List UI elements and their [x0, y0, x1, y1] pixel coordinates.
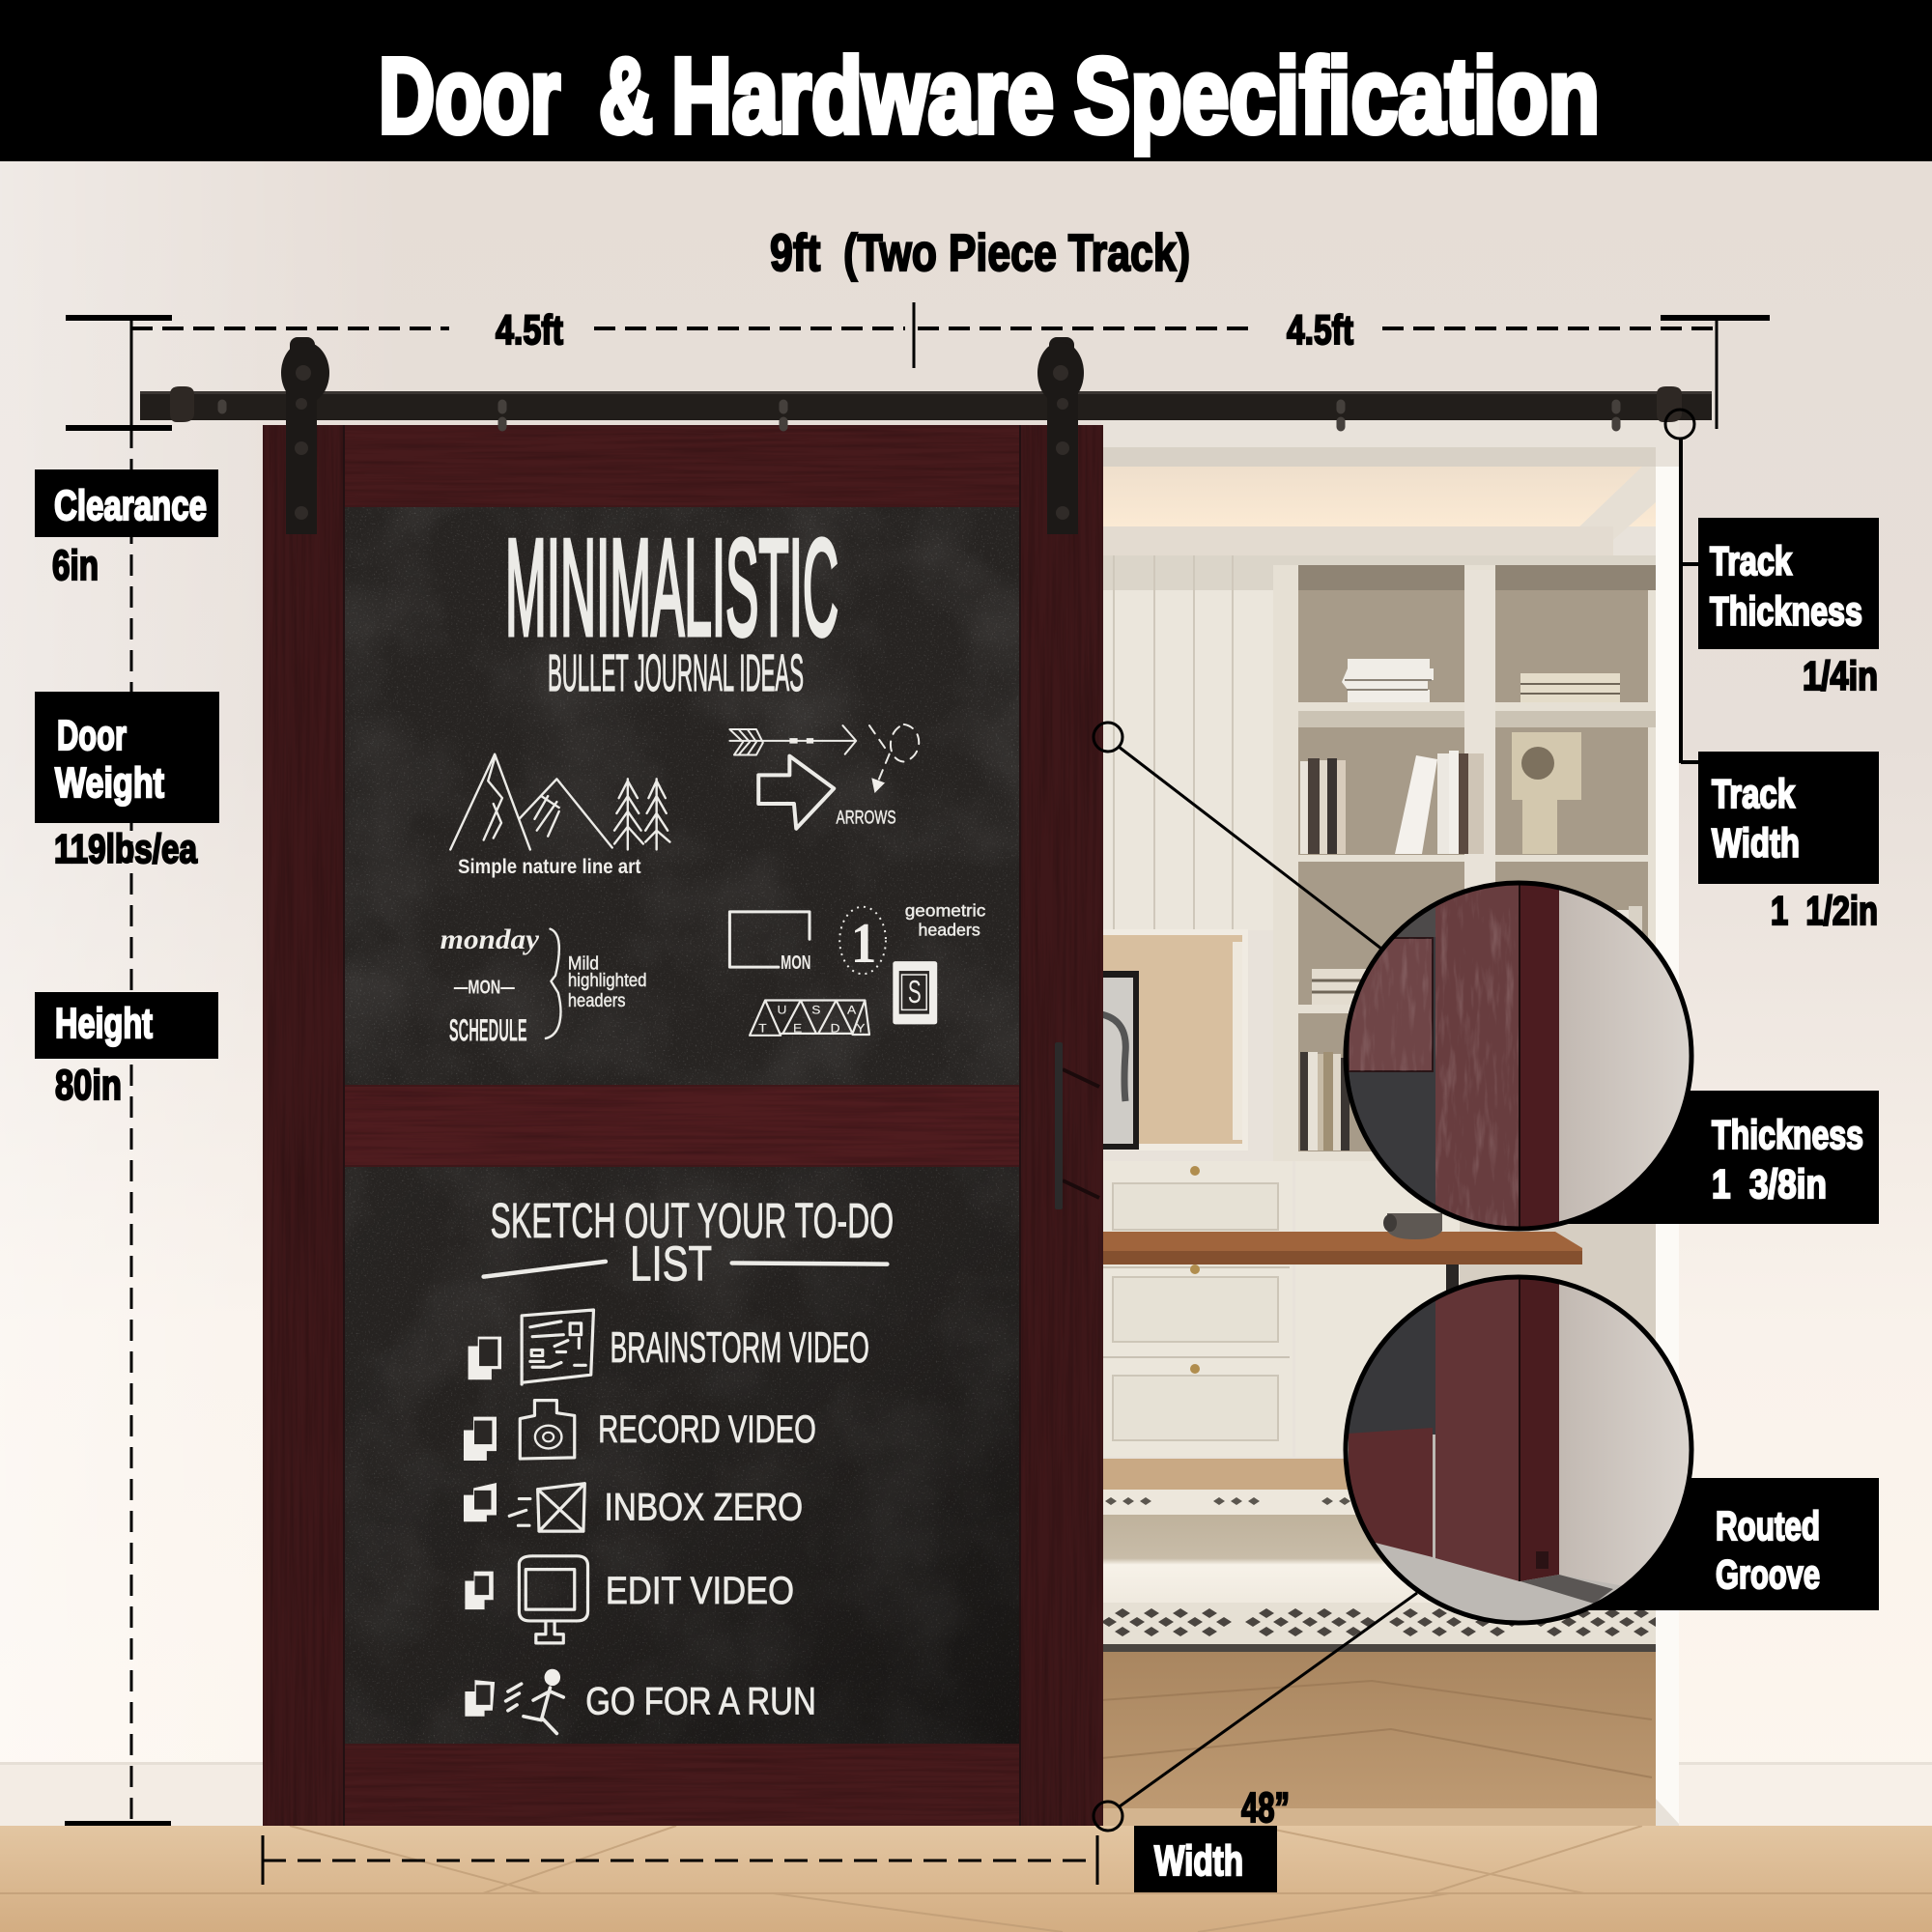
- heading: track length: 9ft (Two Piece Track): [770, 224, 1190, 282]
- label: width: [1134, 1784, 1290, 1892]
- door handle: [1055, 1042, 1099, 1209]
- highlighted headers: [440, 923, 647, 1048]
- label: track thickness: [1698, 518, 1879, 698]
- bottom rail: [344, 1746, 1020, 1825]
- item: record video: [464, 1401, 816, 1461]
- title: &: [599, 37, 653, 156]
- shelf books: [1300, 659, 1642, 1151]
- caption: nature: Simple nature line art: [458, 855, 641, 878]
- geometric headers: A: [847, 1003, 857, 1016]
- geometric headers: geometric: [905, 901, 985, 920]
- label: clearance: [35, 469, 218, 589]
- label: track thickness: Thickness: [1710, 588, 1862, 634]
- item: brainstorm video: [469, 1310, 869, 1384]
- highlighted headers: SCHEDULE: [449, 1013, 527, 1048]
- inset: door edge thickness: [1343, 879, 1699, 1232]
- label: track width: Width: [1712, 820, 1800, 866]
- label: track width: Track: [1712, 771, 1795, 816]
- label: height: [35, 992, 218, 1109]
- label: routed groove: Routed: [1716, 1503, 1820, 1548]
- chalk art: upper panel: BULLET JOURNAL IDEAS: [548, 644, 804, 702]
- door frame: [263, 425, 1103, 1826]
- label: track width: [1698, 752, 1879, 933]
- item: record video: RECORD VIDEO: [598, 1407, 816, 1451]
- cup: [1383, 1213, 1442, 1239]
- geometric headers: S: [811, 1003, 820, 1016]
- rug and floor: [1101, 1459, 1656, 1826]
- geometric headers: 1: [851, 911, 876, 975]
- title bar: [0, 0, 1932, 161]
- item: brainstorm video: BRAINSTORM VIDEO: [610, 1324, 869, 1372]
- item: edit video: [465, 1556, 794, 1643]
- label: left half of track: 4.5ft: [496, 307, 563, 354]
- chalk heading: [508, 536, 838, 692]
- label: height: 80in: [55, 1062, 122, 1109]
- track stop right: [1657, 386, 1682, 422]
- upper chalkboard panel: [345, 507, 1019, 1085]
- geometric headers: headers: [918, 921, 980, 939]
- lower chalkboard panel: [345, 1167, 1019, 1744]
- barn door track: [140, 386, 1712, 427]
- top rail: [344, 427, 1020, 505]
- cabinets and wall behind desk: [1101, 1161, 1656, 1461]
- to-do heading: LIST: [630, 1236, 712, 1292]
- wood grain: [263, 425, 1103, 1826]
- label: clearance: Clearance: [54, 482, 207, 529]
- barn door: [263, 425, 1103, 1826]
- to-do heading: SKETCH OUT YOUR TO-DO: [491, 1193, 894, 1248]
- geometric headers: U: [778, 1003, 786, 1016]
- geometric headers: MON: [781, 952, 810, 974]
- highlighted headers: —MON—: [454, 976, 515, 998]
- desk: [1101, 1232, 1582, 1297]
- geometric headers: [729, 901, 985, 1036]
- label: door weight: [35, 692, 219, 871]
- framed art: [1101, 929, 1248, 1151]
- item: edit video: EDIT VIDEO: [606, 1570, 794, 1612]
- mountains: [450, 754, 669, 849]
- middle rail: [344, 1087, 1020, 1165]
- white wall return: [1656, 467, 1679, 1824]
- chalk art: upper panel: [440, 511, 985, 1048]
- highlighted headers: highlighted: [568, 970, 647, 990]
- chalk art: upper panel: MINIMALISTIC: [505, 511, 838, 665]
- item: inbox zero: INBOX ZERO: [604, 1486, 803, 1528]
- door width dimension: [263, 1835, 1097, 1885]
- label: thickness: [1546, 1091, 1879, 1224]
- label: width: 48”: [1241, 1784, 1290, 1832]
- title: Hardware: [671, 37, 1054, 156]
- chalk drawings: [440, 724, 985, 1048]
- left hanger: [281, 337, 329, 534]
- label: right half of track: 4.5ft: [1287, 307, 1353, 354]
- geometric headers: Y: [856, 1021, 866, 1035]
- label: door weight: 119lbs/ea: [54, 826, 198, 871]
- interior room seen through the opening: [1101, 419, 1679, 1826]
- item: go for a run: [465, 1669, 816, 1733]
- label: clearance: 6in: [52, 542, 99, 589]
- item: go for a run: GO FOR A RUN: [585, 1681, 816, 1723]
- track dimension lines: [66, 302, 1770, 431]
- label: routed groove: Groove: [1716, 1551, 1820, 1597]
- label: track thickness: 1/4in: [1803, 653, 1878, 698]
- beadboard wall: [1101, 555, 1273, 930]
- label: routed groove: [1584, 1478, 1879, 1610]
- to-do heading: [481, 1203, 893, 1281]
- label: track width: 1 1/2in: [1771, 888, 1878, 933]
- geometric headers: T: [758, 1021, 767, 1035]
- geometric headers: E: [793, 1021, 802, 1035]
- geometric headers: D: [831, 1021, 840, 1035]
- chalk art: to-do list: [464, 1193, 894, 1733]
- geometric headers: S: [908, 974, 922, 1010]
- label: width: Width: [1154, 1837, 1243, 1885]
- bookcase: [1273, 565, 1656, 1161]
- highlighted headers: headers: [568, 991, 626, 1011]
- inset: routed groove: [1343, 1275, 1695, 1628]
- label: door weight: Weight: [55, 759, 164, 807]
- label: thickness: 1 3/8in: [1712, 1161, 1827, 1207]
- callout leader: door top edge: [1094, 723, 1381, 949]
- item: inbox zero: [464, 1483, 803, 1531]
- title: Specification: [1074, 37, 1600, 156]
- door height dimension: [65, 427, 171, 1826]
- highlighted headers: monday: [440, 923, 540, 955]
- label: door weight: Door: [57, 712, 127, 759]
- label: thickness: Thickness: [1712, 1112, 1863, 1157]
- right hanger: [1037, 337, 1084, 534]
- highlighted headers: Mild: [568, 953, 599, 974]
- track stop left: [170, 386, 194, 422]
- track leader lines: [1665, 410, 1698, 763]
- title: Door: [379, 37, 560, 156]
- label: track thickness: Track: [1710, 538, 1792, 583]
- label: height: Height: [55, 1000, 153, 1047]
- arrows: [729, 724, 919, 829]
- callout leader: door bottom corner: [1094, 1593, 1417, 1831]
- caption: arrows: ARROWS: [837, 807, 896, 828]
